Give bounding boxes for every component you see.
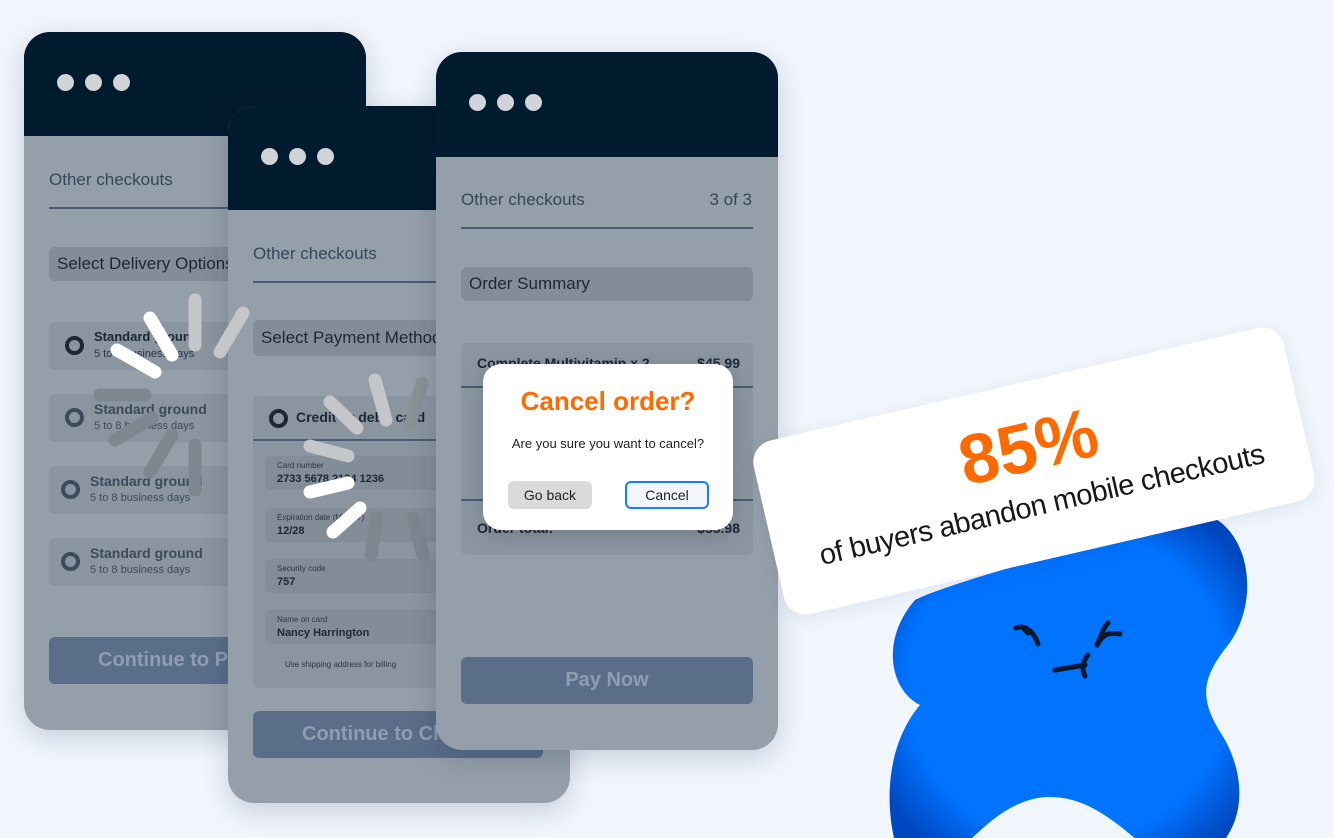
heading: other checkouts 3 of 3: Other checkouts <box>461 190 585 209</box>
button: continue to payment: Continue to Payment <box>98 649 298 671</box>
section: order summary <box>461 267 753 301</box>
button: continue to checkout <box>253 711 543 758</box>
button: go back: Go back <box>524 487 576 503</box>
section: select delivery options: Select Delivery Options <box>57 254 234 273</box>
card form: Card number <box>277 461 324 470</box>
stat label: of buyers abandon mobile checkouts <box>816 438 1267 572</box>
button: continue to payment <box>49 637 339 684</box>
card form: Name on card <box>277 615 327 624</box>
button: pay now <box>461 657 753 704</box>
section: select payment method: Select Payment Method <box>261 328 441 347</box>
card form: Use shipping address for billing <box>285 660 396 669</box>
option 4: 5 to 8 business days <box>90 564 190 576</box>
button: cancel: Cancel <box>645 487 689 503</box>
order items <box>461 343 753 555</box>
option 3 <box>49 466 299 514</box>
callout: 85% statistic <box>749 323 1319 619</box>
order items: $45.99 <box>697 355 740 371</box>
option 1 <box>49 322 299 370</box>
card form: Expiration date (MM/YY) <box>277 513 364 522</box>
order items: $55.98 <box>697 520 740 536</box>
button: cancel <box>625 481 709 509</box>
heading: other checkouts 1: Other checkouts <box>49 170 173 189</box>
card form: 757 <box>277 576 295 588</box>
window 2: payment method <box>228 106 570 803</box>
card form <box>253 396 543 688</box>
window 3: order summary: 3 of 3 <box>709 190 752 209</box>
option 3: 5 to 8 business days <box>90 492 190 504</box>
dialog: cancel order <box>483 364 733 530</box>
window 1: delivery options <box>24 32 366 730</box>
option 1: 5 to 8 business days <box>94 348 194 360</box>
dialog title: Cancel order? <box>521 386 695 416</box>
order items: Complete Multivitamin x 2 <box>477 355 650 371</box>
dialog text: Are you sure you want to cancel? <box>512 436 704 451</box>
section: select delivery options <box>49 247 299 281</box>
heading: other checkouts 2: Other checkouts <box>253 244 377 263</box>
option 3: Standard ground <box>90 473 203 489</box>
header bar 2 <box>228 106 570 210</box>
button: pay now: Pay Now <box>565 669 649 691</box>
card form: Credit or debit card <box>296 409 425 425</box>
option 2 <box>49 394 299 442</box>
stat number: 85% <box>951 393 1105 500</box>
button: continue to checkout: Continue to Checkout <box>302 723 510 745</box>
card form: 12/28 <box>277 525 305 537</box>
card form: Nancy Harrington <box>277 627 369 639</box>
button: go back <box>508 481 592 509</box>
spinner icons <box>94 294 430 559</box>
section: select payment method <box>253 320 543 356</box>
option 2: 5 to 8 business days <box>94 420 194 432</box>
header bar 3 <box>436 52 778 157</box>
header bar 1 <box>24 32 366 136</box>
window 3: order summary <box>436 52 778 750</box>
order items: Order total: <box>477 520 553 536</box>
section: order summary: Order Summary <box>469 274 590 293</box>
card form: 2733 5678 2134 1236 <box>277 473 384 485</box>
option 1: Standard ground <box>94 329 199 344</box>
option 4 <box>49 538 299 586</box>
option 2: Standard ground <box>94 401 207 417</box>
option 4: Standard ground <box>90 545 203 561</box>
card form: Security code <box>277 564 325 573</box>
